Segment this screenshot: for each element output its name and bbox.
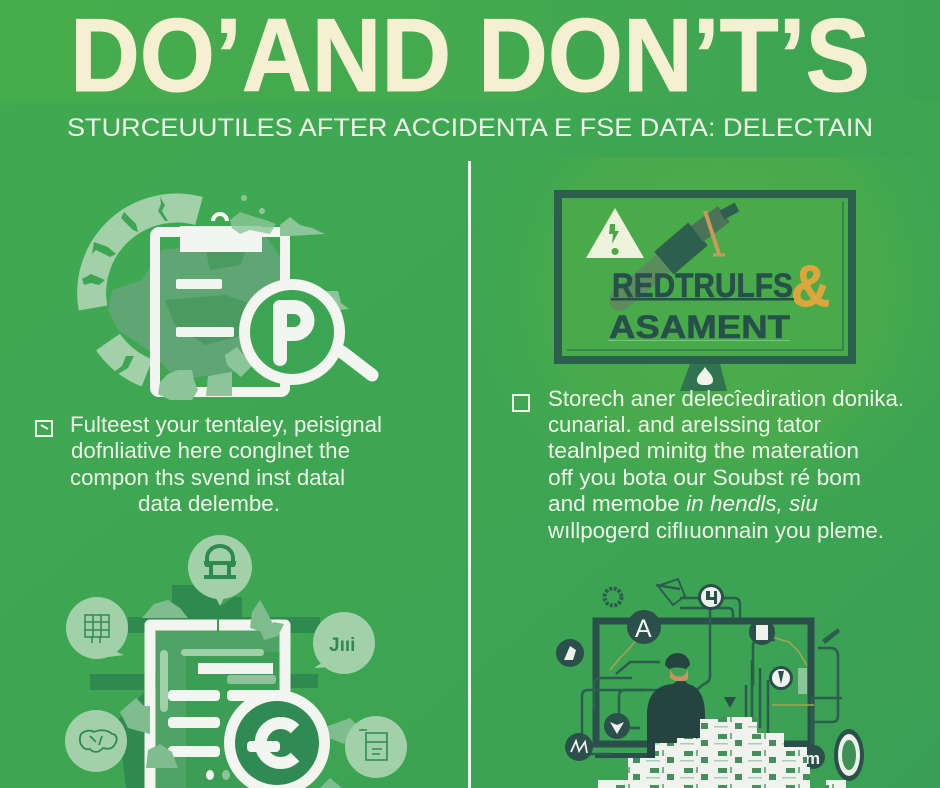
text block: don't advice: off you bota our Soubst ré bom xyxy=(548,465,861,490)
header band xyxy=(0,0,940,101)
ampersand: & xyxy=(791,254,830,319)
bubble: brain xyxy=(65,710,127,772)
checkbox icon xyxy=(513,395,529,411)
circuit lines xyxy=(582,585,842,754)
ring cracks xyxy=(82,197,168,374)
arrow down xyxy=(724,697,736,708)
clipboard clip xyxy=(180,226,262,252)
monitor screen xyxy=(558,194,852,360)
money pile xyxy=(598,717,846,788)
icon: document with euro and bubbles xyxy=(65,535,407,788)
tag xyxy=(658,579,685,605)
monitor base xyxy=(595,753,810,758)
text block: do advice: data delembe. xyxy=(138,491,280,516)
person xyxy=(647,653,705,764)
euro badge xyxy=(230,696,324,788)
magnifier lens xyxy=(244,284,340,380)
icon: warning monitor xyxy=(558,194,852,391)
hammer xyxy=(620,207,737,300)
paper xyxy=(156,630,285,788)
bubble: form xyxy=(345,716,407,778)
text block: don't advice: and memobe in hendls, siu xyxy=(548,491,818,516)
text block: do advice: Fulteest your tentaley, peisignal xyxy=(70,412,382,437)
bubble: grid xyxy=(66,597,128,659)
subtitle: STURCEUUTILES AFTER ACCIDENTA E FSE DATA: DELECTAIN xyxy=(67,114,873,142)
coin token xyxy=(834,729,864,781)
screen frame xyxy=(596,621,811,744)
text block: don't advice: cunarial. and areIssing tator xyxy=(548,412,821,437)
document rows xyxy=(168,649,277,780)
clip ring xyxy=(213,214,227,221)
inner screen line xyxy=(567,201,843,350)
bubble: chart label: Jııi xyxy=(329,635,355,656)
center divider xyxy=(468,161,471,788)
screen word two: ASAMENT xyxy=(609,309,791,345)
bubble: lock xyxy=(188,535,252,606)
node icons xyxy=(556,584,825,769)
panel: don't column xyxy=(513,194,904,788)
letter P xyxy=(280,307,308,359)
right panel background xyxy=(472,157,940,577)
sidebar xyxy=(160,654,168,708)
node icons: m xyxy=(805,749,820,768)
document frame xyxy=(150,625,285,788)
clipboard lines xyxy=(176,279,234,337)
underline xyxy=(611,298,794,300)
text block: do advice: dofnliative here conglnet the xyxy=(71,438,350,463)
frame notch xyxy=(217,618,219,632)
icon: clipboard with magnifier xyxy=(82,195,372,400)
monitor stand xyxy=(680,364,727,391)
broken ring xyxy=(92,208,199,373)
text block: don't advice: wıllpogerd ciflıuonnain you pleme. xyxy=(547,518,884,543)
text block: do advice xyxy=(36,412,382,516)
screen word one: REDTRULFS xyxy=(612,267,793,305)
stand bulb xyxy=(697,367,713,385)
text block: don't advice: tealnlped minitg the materation xyxy=(548,438,859,463)
gold wires xyxy=(610,628,814,705)
text block: don't advice: Storech aner delecîediration donika. xyxy=(548,386,904,411)
euro bar xyxy=(247,741,280,752)
checkbox icon xyxy=(36,421,52,436)
splatter shapes xyxy=(158,195,349,400)
node icons: A xyxy=(635,615,652,643)
pale panel xyxy=(798,668,807,694)
icon: hacker with money xyxy=(556,579,864,788)
clipboard frame xyxy=(155,232,285,392)
text block: don't advice xyxy=(513,386,904,543)
warning triangle xyxy=(586,208,644,258)
splatter shapes xyxy=(120,600,358,788)
gear xyxy=(604,588,622,606)
magnifier handle xyxy=(342,352,372,375)
dark map shapes xyxy=(165,240,255,345)
word underline xyxy=(608,340,790,341)
warning bolt xyxy=(609,224,619,255)
title: DO’AND DON’T’S xyxy=(70,0,870,114)
euro sign xyxy=(261,723,295,763)
paper inner green xyxy=(186,652,285,788)
plug xyxy=(822,628,840,644)
bubble: chart label xyxy=(313,612,375,674)
dark backdrop xyxy=(90,585,324,788)
blotch behind clipboard xyxy=(108,230,288,380)
text block: do advice: compon ths svend inst datal xyxy=(70,465,345,490)
panel: do column xyxy=(36,195,407,788)
